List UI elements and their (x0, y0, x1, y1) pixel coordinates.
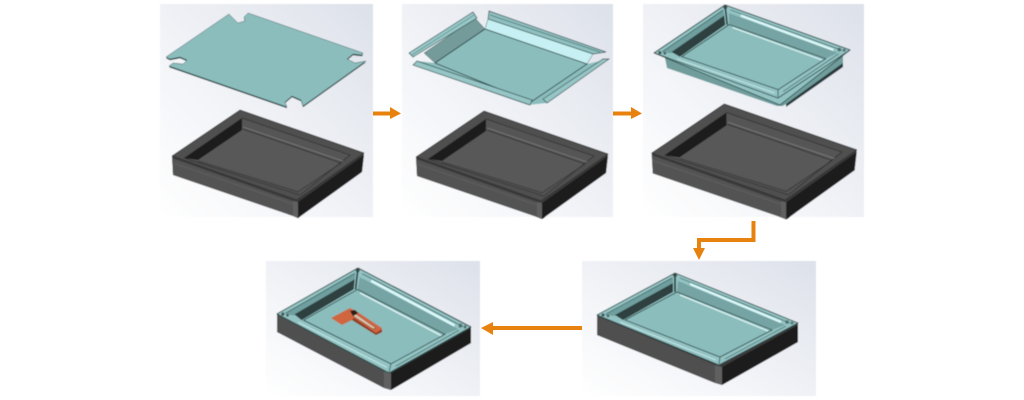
arrow: step 2 to step 3 (613, 107, 642, 119)
mold (652, 104, 857, 219)
bent sheet (409, 11, 609, 105)
panel: step 5 part placed on tray (266, 261, 480, 396)
tray rim (654, 5, 850, 105)
flat sheet (166, 13, 366, 108)
panel: step 3 folded tray above mold (643, 0, 864, 219)
panel: step 4 tray seated in mold (582, 261, 816, 396)
panel: step 2 bent sheet above mold (402, 4, 613, 219)
tray (597, 273, 798, 365)
tray skirt (665, 55, 843, 107)
tray (271, 266, 477, 375)
arrow: step 1 to step 2 (373, 107, 401, 119)
mold (416, 111, 608, 219)
mold (172, 110, 364, 218)
mold base (277, 314, 471, 390)
mold base (597, 315, 798, 385)
panel: step 1 flat sheet above mold (160, 4, 373, 218)
arrow: step 4 to step 5 (481, 322, 582, 335)
copper part (331, 308, 382, 335)
folded tray (649, 0, 855, 105)
arrow: step 3 to step 4 (693, 221, 754, 260)
